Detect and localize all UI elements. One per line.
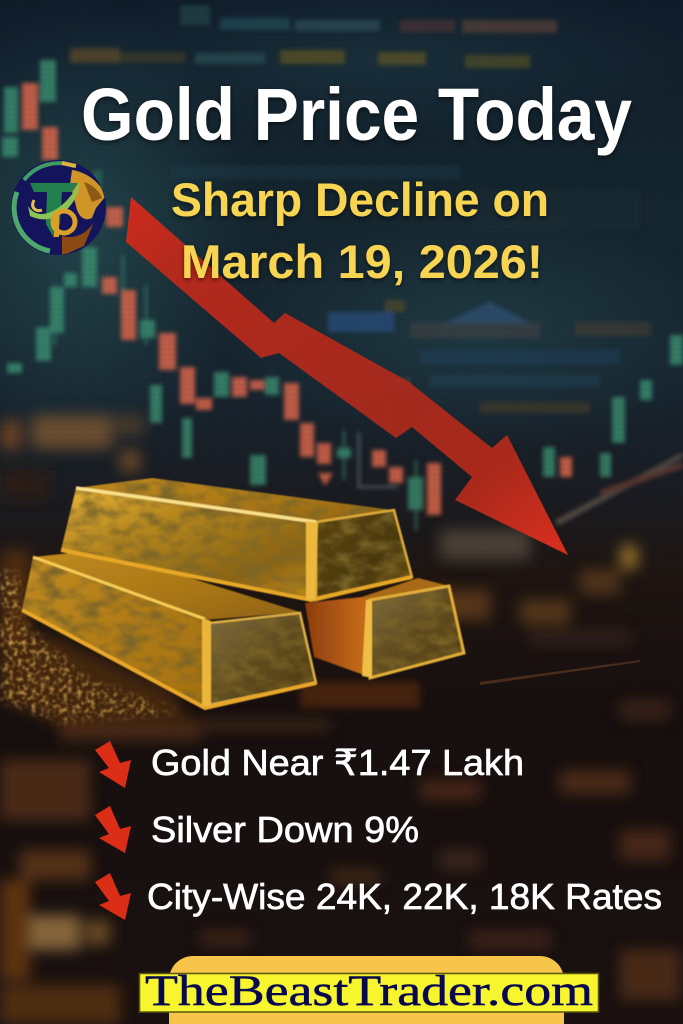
icon: red down arrow 2 [95, 806, 131, 853]
bullet: silver down [95, 806, 419, 853]
blurred ticker text at top [70, 5, 640, 230]
website url: TheBeastTrader.com [145, 968, 593, 1015]
fine screen grid [0, 0, 683, 560]
gold bars stack [15, 475, 470, 715]
label: silver down: Silver Down 9% [151, 809, 419, 850]
diagonal light streaks [555, 452, 683, 526]
gold pill [169, 956, 564, 1024]
icon: red down arrow 1 [95, 741, 131, 788]
blurred right-side market panel [328, 300, 650, 413]
icon: red down arrow 3 [95, 873, 131, 920]
yellow highlight box [140, 974, 598, 1012]
label: city-wise rates: City-Wise 24K, 22K, 18K Rates [147, 876, 662, 917]
teal haze [0, 0, 683, 460]
label: gold near: Gold Near ₹1.47 Lakh [151, 742, 524, 783]
bullet: gold near [95, 741, 524, 788]
subtitle line 2: March 19, 2026! [181, 235, 543, 288]
back right gold bar [305, 578, 470, 680]
title: Gold Price Today [81, 73, 632, 156]
blurred candlestick chart [2, 60, 683, 530]
big falling red arrow [126, 197, 568, 555]
floor bokeh [0, 545, 680, 1024]
lower left gold bar [15, 550, 320, 715]
gold dust on floor [0, 540, 640, 740]
upper gold bar [55, 475, 417, 605]
footer website banner [140, 956, 598, 1024]
icon: lion logo badge [11, 160, 106, 256]
bullet: city-wise rates [95, 873, 662, 920]
warm bokeh glow mid-left [0, 415, 530, 560]
subtitle line 1: Sharp Decline on [171, 173, 549, 226]
subtitle [171, 173, 549, 288]
